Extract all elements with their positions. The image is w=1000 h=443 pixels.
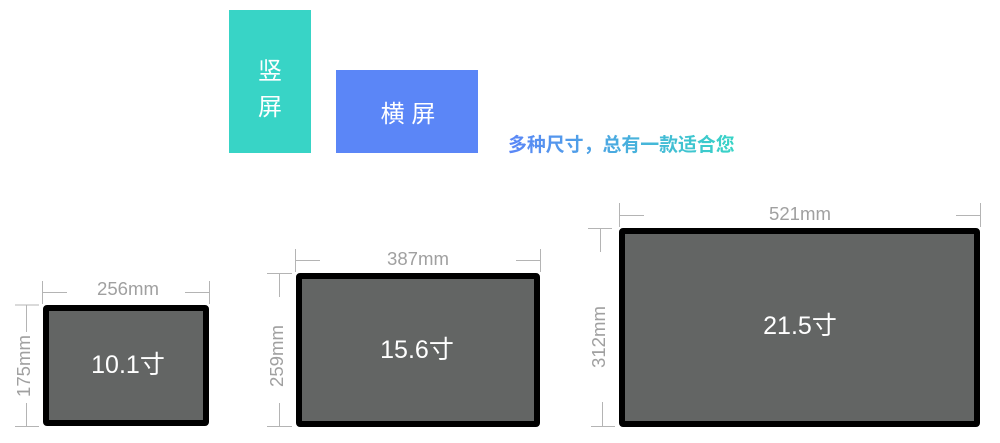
height dimension: 312mm: [588, 228, 615, 426]
panel: portrait orientation: 屏: [258, 94, 282, 121]
height dimension: 175mm: [13, 305, 39, 426]
tagline: 多种尺寸，总有一款适合您: [508, 134, 735, 156]
panel: 10.1 inch screen: [13, 278, 210, 426]
screen: 15.6 inch: [299, 276, 537, 424]
screen: 10.1 inch: [46, 308, 206, 423]
panel: landscape orientation: 横 屏: [381, 101, 435, 128]
size label: 15.6 inch: 15.6寸: [380, 336, 454, 364]
panel: 21.5 inch screen: [588, 203, 980, 426]
height dimension: 259mm: [266, 274, 292, 426]
panel: portrait orientation: 竖: [258, 58, 282, 85]
width dimension: 256mm: [42, 278, 210, 304]
height dimension: 175mm: 175mm: [13, 335, 34, 397]
size label: 21.5 inch: 21.5寸: [763, 312, 837, 340]
size label: 10.1 inch: 10.1寸: [91, 351, 165, 379]
screen: 21.5 inch: [622, 231, 977, 424]
height dimension: 312mm: 312mm: [588, 306, 609, 368]
panel: 15.6 inch screen: [266, 248, 540, 426]
panel: landscape orientation: [336, 70, 478, 153]
width dimension: 256mm: 256mm: [97, 278, 159, 299]
width dimension: 521mm: 521mm: [769, 203, 831, 224]
width dimension: 387mm: 387mm: [387, 248, 449, 269]
panel: portrait orientation: [229, 10, 311, 153]
width dimension: 521mm: [620, 203, 980, 227]
width dimension: 387mm: [296, 248, 540, 272]
height dimension: 259mm: 259mm: [266, 325, 287, 387]
